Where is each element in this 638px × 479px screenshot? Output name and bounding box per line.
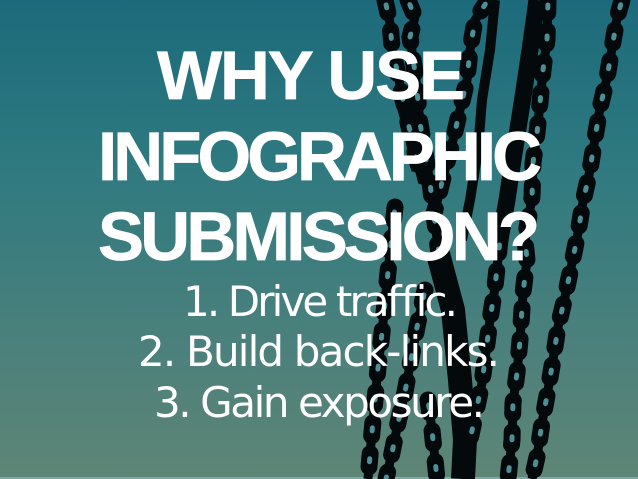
benefit 1: 1. Drive traffic.	[183, 277, 458, 326]
benefit 3: 3. Gain exposure.	[154, 378, 485, 427]
title	[98, 37, 542, 275]
list of benefits	[138, 277, 500, 427]
title: WHY USE	[157, 37, 465, 114]
hanging chains photo	[368, 0, 622, 479]
benefit 2: 2. Build back-links.	[138, 327, 500, 376]
bottom edge strip	[0, 477, 638, 479]
title: SUBMISSION?	[98, 198, 540, 275]
title: INFOGRAPHIC	[98, 118, 542, 195]
